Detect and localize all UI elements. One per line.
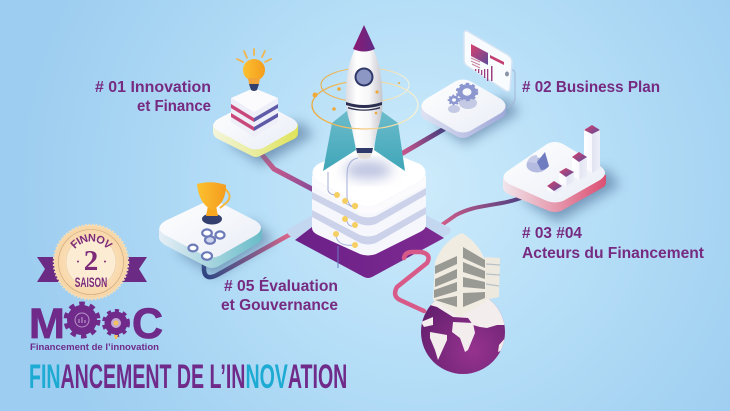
seal text: FINNOV: [70, 234, 113, 249]
label: 05 Evaluation et Gouvernance: et Gouvernance: [221, 297, 338, 314]
top: [504, 142, 605, 202]
label: 02 Business Plan: # 02 Business Plan: [522, 79, 660, 96]
panel: evaluation platform: [159, 182, 274, 277]
pie chart: [526, 152, 549, 172]
side: [213, 124, 298, 157]
connector pipes: [204, 129, 526, 277]
badge: Finnov saison 2: •: [77, 259, 80, 266]
server top: [312, 146, 426, 206]
side: [503, 175, 606, 212]
shadow: [175, 222, 274, 277]
panel: central server platform: [287, 146, 451, 278]
striped cube: [231, 98, 278, 137]
gear one: [66, 304, 98, 336]
server stack: [312, 176, 426, 256]
globe: [421, 290, 505, 374]
title: FINANCEMENT DE L’INNOVATION: [29, 357, 347, 395]
badge: Finnov saison 2: SAISON: [75, 276, 107, 291]
pipe to globe: [395, 252, 429, 311]
icon: gears: [448, 84, 477, 113]
label: 01 Innovation et Finance: et Finance: [137, 98, 211, 115]
label: 03 04 Acteurs du Financement: [522, 225, 705, 262]
window: [354, 68, 374, 86]
ribbon: [37, 257, 62, 282]
top: [422, 80, 506, 132]
side: [159, 228, 262, 268]
seal: [54, 225, 128, 299]
continents: [422, 299, 504, 360]
label: 05 Evaluation et Gouvernance: [221, 276, 338, 314]
logo: MOOC: [29, 300, 163, 352]
gear two: [104, 310, 128, 339]
panel: actors chart platform: [503, 125, 620, 222]
letter M: M: [29, 300, 65, 348]
panel: innovation platform: [213, 49, 314, 165]
panel: globe and building: [395, 233, 506, 374]
panel: business plan platform: [421, 31, 520, 144]
bar columns: [547, 125, 600, 193]
icon: tablet: [464, 31, 515, 108]
badge: Finnov saison 2: 2: [84, 245, 98, 277]
label: 05 Evaluation et Gouvernance: # 05 Évaluation: [224, 276, 338, 295]
logo subtitle: Financement de l’innovation: [30, 342, 159, 352]
shadow: [225, 122, 314, 165]
top: [160, 200, 261, 258]
building: [433, 233, 500, 317]
stripes: [346, 102, 382, 108]
purple base: [295, 227, 444, 278]
side: [421, 105, 506, 138]
nozzle: [356, 148, 373, 153]
icon: trophy: [197, 182, 230, 224]
orbit front and sparks: [312, 105, 418, 129]
icon: light bulb: [237, 49, 271, 91]
top: [214, 102, 298, 150]
label: 01 Innovation et Finance: [95, 79, 211, 115]
badge: Finnov saison 2: •: [104, 259, 107, 266]
rocket body: [346, 49, 382, 148]
label: 03 04 Acteurs du Financement: Acteurs du Financement: [522, 245, 705, 262]
badge: Finnov saison 2: [37, 224, 147, 300]
letter C: C: [132, 300, 163, 348]
shadow: [520, 168, 620, 222]
shadow: [435, 98, 520, 144]
icon: coins: [188, 229, 224, 260]
orbit rings back: [321, 68, 409, 102]
light base plate: [287, 200, 451, 272]
label: 01 Innovation et Finance: # 01 Innovation: [95, 79, 211, 96]
panel: rocket: [312, 25, 418, 171]
cables and connectors: [328, 158, 358, 268]
fins: [323, 110, 356, 171]
label: 03 04 Acteurs du Financement: # 03 #04: [522, 225, 582, 242]
nose: [353, 25, 375, 52]
